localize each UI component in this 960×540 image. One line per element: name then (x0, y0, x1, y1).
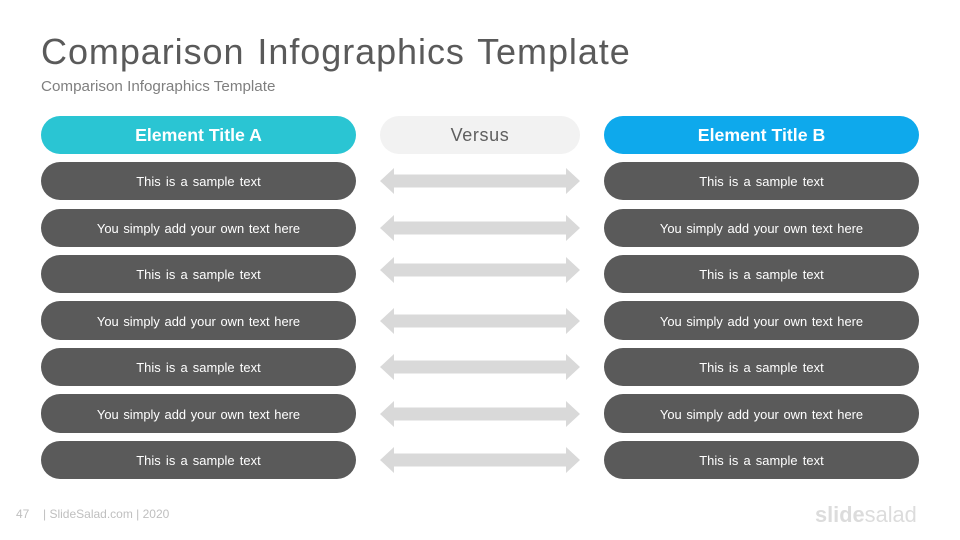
heading: Element Title B (604, 116, 919, 154)
right row 6: You simply add your own text here (660, 407, 863, 422)
heading: Versus: Versus (451, 125, 509, 145)
heading: Element Title A (41, 116, 356, 154)
logo: slidesalad: slidesalad (815, 502, 917, 527)
heading: Element Title A: Element Title A (135, 125, 262, 145)
right row 3 (604, 255, 919, 293)
right row 5: This is a sample text (699, 360, 824, 375)
arrow 1 (380, 168, 580, 194)
right row 2 (604, 209, 919, 247)
right row 4 (604, 301, 919, 340)
right row 5 (604, 348, 919, 386)
left row 1 (41, 162, 356, 200)
right row 4: You simply add your own text here (660, 314, 863, 329)
right row 7: This is a sample text (699, 453, 824, 468)
left row 7 (41, 441, 356, 479)
right row 2: You simply add your own text here (660, 221, 863, 236)
left row 4: You simply add your own text here (97, 314, 300, 329)
right row 1: This is a sample text (699, 174, 824, 189)
left row 6: You simply add your own text here (97, 407, 300, 422)
left row 5 (41, 348, 356, 386)
left row 5: This is a sample text (136, 360, 261, 375)
left row 2 (41, 209, 356, 247)
right row 7 (604, 441, 919, 479)
left row 2: You simply add your own text here (97, 221, 300, 236)
arrow 3 (380, 257, 580, 283)
arrow 2 (380, 215, 580, 241)
arrow 5 (380, 354, 580, 380)
right row 6 (604, 394, 919, 433)
right row 3: This is a sample text (699, 267, 824, 282)
heading: Element Title B: Element Title B (698, 125, 825, 145)
arrow 7 (380, 447, 580, 473)
right row 1 (604, 162, 919, 200)
arrow 4 (380, 308, 580, 334)
subtitle: Comparison Infographics Template (41, 78, 275, 95)
title: Comparison Infographics Template (41, 31, 631, 72)
left row 3: This is a sample text (136, 267, 261, 282)
left row 1: This is a sample text (136, 174, 261, 189)
left row 3 (41, 255, 356, 293)
heading: Versus (380, 116, 580, 154)
arrow 6 (380, 401, 580, 427)
footer text: | SlideSalad.com | 2020 (43, 507, 169, 521)
left row 7: This is a sample text (136, 453, 261, 468)
left row 6 (41, 394, 356, 433)
page number: 47 (16, 507, 29, 521)
left row 4 (41, 301, 356, 340)
